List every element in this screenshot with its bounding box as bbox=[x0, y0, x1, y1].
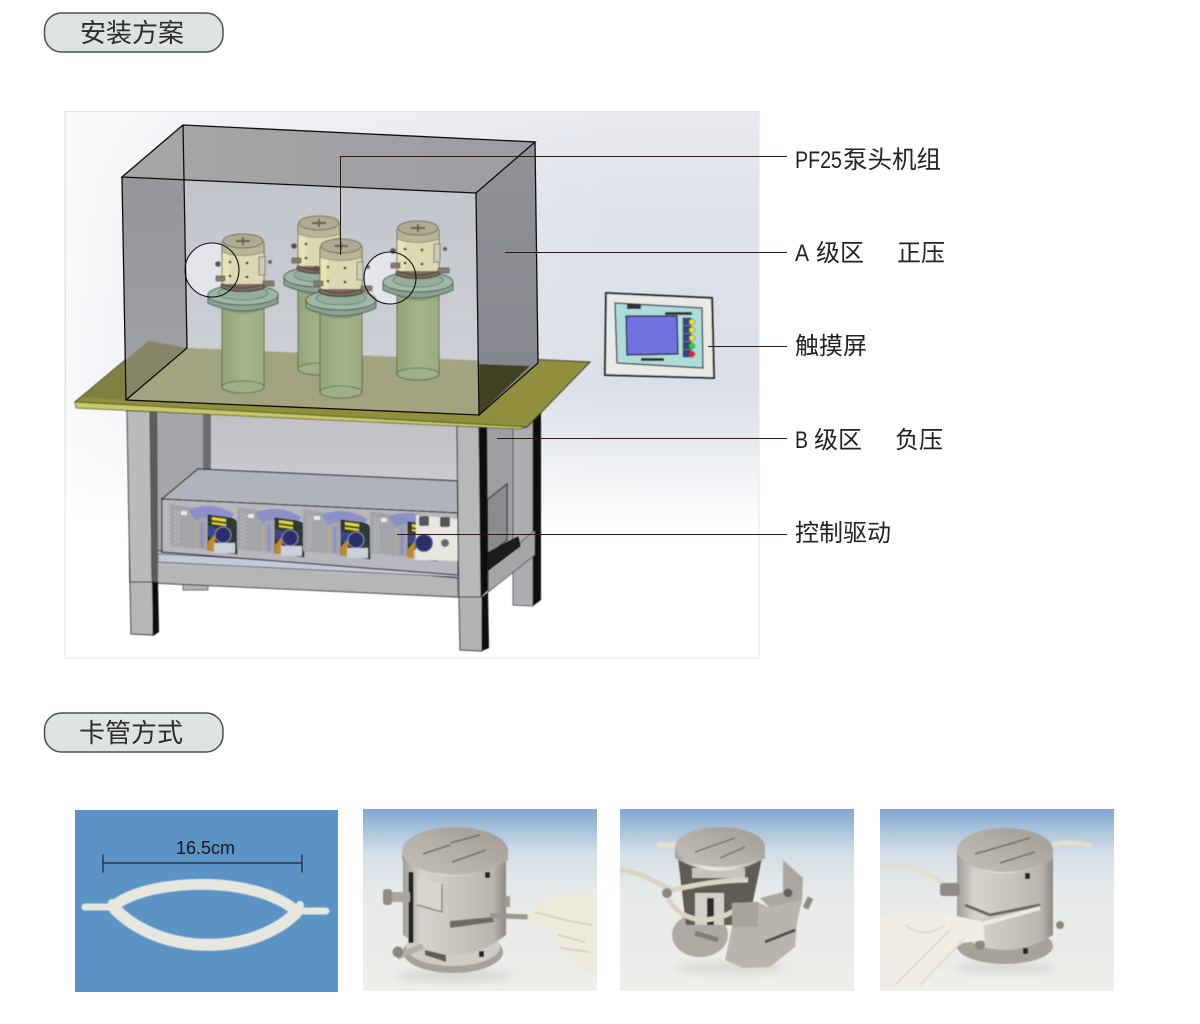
table top bbox=[75, 341, 590, 429]
pump base bbox=[672, 913, 728, 957]
section circle left fill bbox=[185, 243, 239, 297]
label: touch screen: 触摸屏 bbox=[795, 333, 867, 360]
pump body bbox=[957, 850, 1053, 950]
cap engraving bbox=[975, 838, 1035, 863]
shadow bbox=[955, 963, 1055, 973]
tool rod bbox=[983, 908, 1040, 924]
label: grade A zone positive pressure: A bbox=[795, 240, 809, 267]
side knob bbox=[940, 883, 960, 896]
drive module 1 bbox=[170, 504, 237, 554]
heading: 安装方案: 安装方案 bbox=[80, 18, 184, 48]
pump head 3 front bbox=[306, 239, 376, 398]
heading: 卡管方式: 卡管方式 bbox=[79, 718, 183, 748]
lower opening bbox=[425, 950, 446, 962]
silicone tube bbox=[85, 884, 326, 945]
drive front panel bbox=[416, 515, 458, 561]
cap engraving bbox=[695, 838, 745, 858]
label: grade A zone positive pressure: 正压 bbox=[897, 240, 945, 267]
pump base bbox=[403, 931, 503, 973]
tool rod bbox=[490, 916, 529, 917]
front table legs bbox=[127, 410, 489, 651]
label: PF25 pump head unit: 泵头机组 bbox=[843, 146, 941, 174]
pump head 2 back bbox=[284, 216, 354, 375]
drive module 4 bbox=[370, 511, 437, 561]
label: grade B zone negative pressure: 负压 bbox=[895, 427, 943, 454]
photo: tube with 16.5cm dimension bbox=[75, 810, 338, 992]
latch bbox=[695, 933, 718, 940]
clamp slot and squares bbox=[965, 905, 1040, 915]
pump cap bbox=[675, 827, 765, 867]
section circle outlines bbox=[185, 243, 416, 304]
drive module 3 bbox=[303, 509, 370, 559]
photo: closing clamp with gloved hand bbox=[880, 809, 1114, 991]
section circle right fill bbox=[364, 252, 416, 304]
label: grade A zone positive pressure: 级区 bbox=[816, 240, 864, 267]
control drive enclosure bbox=[162, 469, 520, 575]
pump cap rim bbox=[675, 848, 765, 871]
panel: installation CAD diagram bbox=[65, 112, 759, 658]
glass enclosure front faces bbox=[122, 125, 538, 415]
shadow bbox=[675, 962, 785, 974]
dimension value: 16.5cm bbox=[176, 838, 235, 858]
shadow bbox=[397, 970, 513, 982]
workbench under-table frame bbox=[130, 405, 541, 606]
glass enclosure back faces bbox=[82, 125, 538, 415]
glove hand bbox=[881, 912, 985, 990]
tube loop bbox=[620, 870, 748, 920]
pump head 4 right bbox=[383, 221, 453, 380]
pump cap rim bbox=[402, 850, 508, 876]
pump cap rim bbox=[957, 848, 1053, 874]
side knob bbox=[388, 892, 410, 902]
photo: clamp closed, tool on right bbox=[363, 809, 597, 991]
dimension line bbox=[103, 854, 302, 872]
tubes bbox=[881, 843, 1092, 885]
leader lines bbox=[340, 156, 787, 534]
rotor chamber bbox=[678, 858, 762, 925]
label: grade B zone negative pressure: 级区 bbox=[814, 427, 862, 454]
open clamp upper jaw bbox=[760, 860, 803, 908]
heading: 安装方案 bbox=[44, 13, 223, 52]
photo: clamp opened with tube bbox=[620, 809, 854, 991]
label: PF25 pump head unit: PF25 bbox=[795, 147, 842, 174]
pump cap bbox=[402, 827, 508, 875]
background tube bbox=[657, 842, 682, 848]
clamp slots bbox=[450, 917, 494, 928]
glove hand bbox=[527, 893, 597, 975]
cap engraving bbox=[423, 835, 486, 862]
label: grade A zone positive pressure bbox=[795, 240, 945, 267]
open clamp lower jaw bbox=[725, 900, 802, 968]
heading: 卡管方式 bbox=[44, 713, 223, 752]
pump head 1 left bbox=[208, 234, 278, 393]
lower lever bbox=[397, 946, 423, 957]
label: control drive: 控制驱动 bbox=[795, 520, 891, 547]
pump base bbox=[957, 928, 1053, 964]
drive module 2 bbox=[237, 507, 304, 557]
touch screen bbox=[605, 293, 714, 378]
pump cap bbox=[957, 828, 1053, 872]
label: grade B zone negative pressure: B bbox=[795, 427, 808, 454]
label: PF25 pump head unit bbox=[795, 146, 941, 174]
pump body bbox=[403, 852, 506, 955]
label: grade B zone negative pressure bbox=[795, 427, 943, 454]
